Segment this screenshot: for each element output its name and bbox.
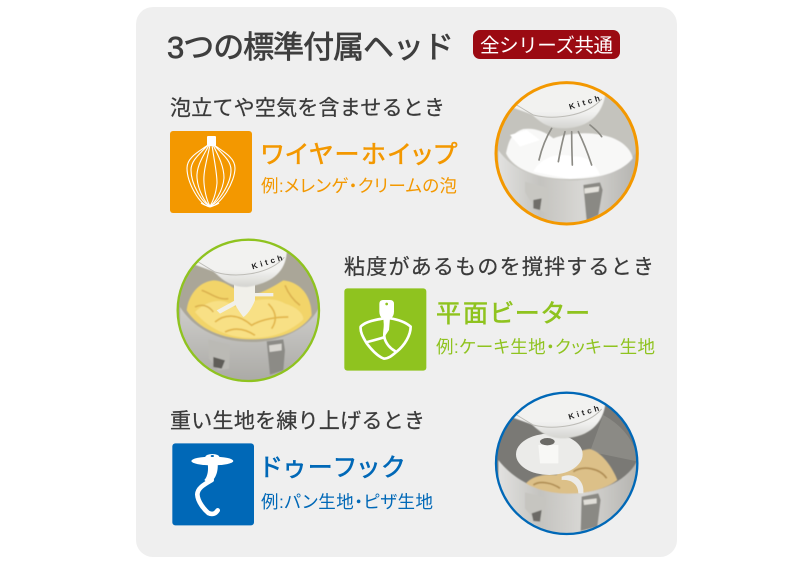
panel: wire whip xyxy=(170,75,650,230)
heading: beater use: 粘度があるものを撹拌するとき xyxy=(344,256,654,279)
heading: hook use: 重い生地を練り上げるとき xyxy=(170,410,425,433)
product name: ドゥーフック xyxy=(261,454,404,482)
photo: mixing batter: Kitch xyxy=(251,253,284,271)
icon: dough hook xyxy=(172,443,254,525)
example text: 例:ケーキ生地・クッキー生地 xyxy=(436,337,655,357)
title: 3つの標準付属ヘッド xyxy=(167,30,454,65)
product name: 平面ビーター xyxy=(436,300,590,328)
example text: 例:パン生地・ピザ生地 xyxy=(261,492,433,512)
photo: mixing batter xyxy=(176,238,320,382)
badge: common to all series: 全シリーズ共通 xyxy=(480,35,613,57)
icon: flat beater xyxy=(344,288,426,371)
photo: whisking egg whites xyxy=(494,81,639,226)
heading: whip use: 泡立てや空気を含ませるとき xyxy=(170,97,445,120)
photo: kneading dough xyxy=(494,392,638,536)
panel: flat beater xyxy=(172,232,655,387)
product name: ワイヤーホイップ xyxy=(261,141,457,169)
badge: common to all series xyxy=(473,30,620,59)
photo: kneading dough: Kitch xyxy=(567,404,600,422)
photo: whisking egg whites: Kitch xyxy=(568,94,601,112)
background panel xyxy=(136,7,677,557)
example text: 例:メレンゲ・クリームの泡 xyxy=(261,176,457,196)
icon: wire whip xyxy=(170,131,252,213)
panel: dough hook xyxy=(170,385,650,540)
